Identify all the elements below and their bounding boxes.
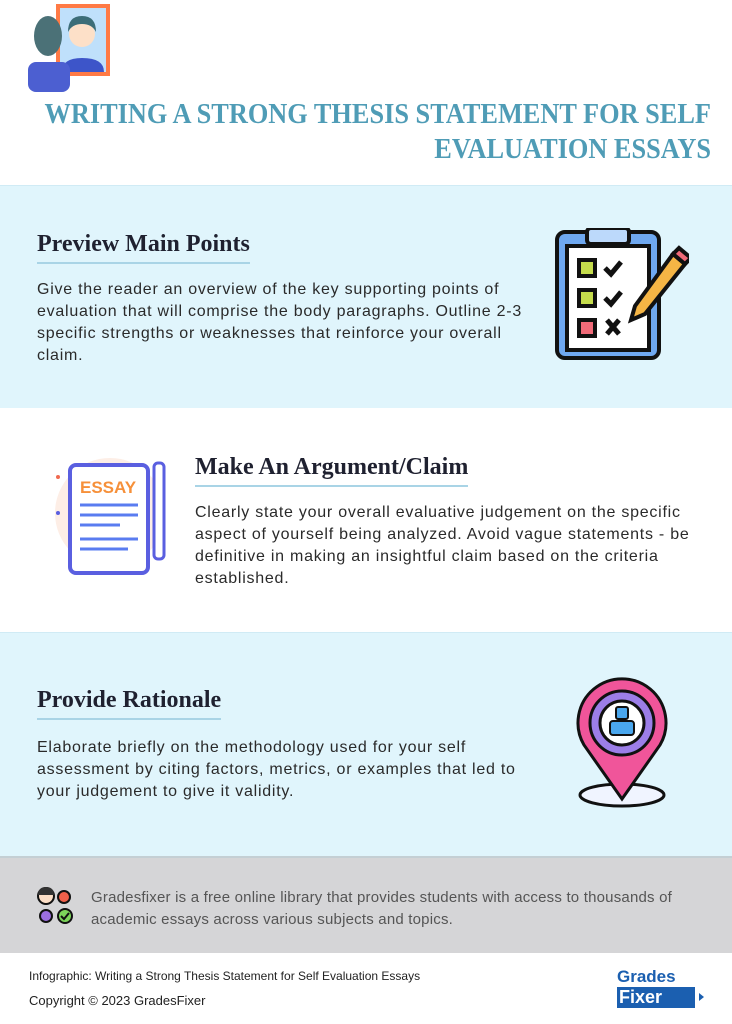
title: EVALUATION ESSAYS	[434, 134, 711, 165]
title: WRITING A STRONG THESIS STATEMENT FOR SELF	[45, 99, 711, 130]
text: provide rationale: your judgement to give it validity.	[37, 783, 294, 800]
heading: preview main points: Preview Main Points	[37, 231, 250, 257]
icon: location pin with person	[576, 677, 668, 808]
text: make an argument: established.	[195, 570, 289, 587]
icon: students A/B	[37, 887, 73, 924]
panel: provide rationale	[0, 632, 732, 856]
text: provide rationale	[37, 739, 516, 800]
panel: preview main points	[0, 185, 732, 408]
text: provide rationale: assessment by citing factors, metrics, or examples that led to	[37, 761, 516, 778]
icon: essay document	[55, 458, 166, 575]
text: make an argument: definitive in making an insightful claim based on the criteria	[195, 548, 659, 565]
text: gradesfixer description: Gradesfixer is a free online library that provides students with access to thousands of	[91, 889, 672, 906]
text: gradesfixer description: academic essays across various subjects and topics.	[91, 911, 453, 928]
text: make an argument	[195, 504, 689, 587]
heading: make an argument: Make An Argument/Claim	[195, 454, 468, 480]
footer copyright: Copyright © 2023 GradesFixer	[29, 993, 206, 1008]
text: preview main points: Give the reader an overview of the key supporting points of	[37, 281, 499, 298]
logo: gradesfixer: Grades	[617, 967, 676, 986]
text: make an argument: Clearly state your overall evaluative judgement on the specific	[195, 504, 681, 521]
panel: gradesfixer info	[0, 856, 732, 953]
logo: gradesfixer: Fixer	[619, 987, 662, 1007]
text: gradesfixer description	[91, 889, 672, 928]
logo: gradesfixer	[617, 967, 704, 1008]
icon: essay document: ESSAY	[80, 478, 137, 497]
icon: checklist clipboard	[555, 228, 689, 360]
heading: provide rationale: Provide Rationale	[37, 687, 221, 713]
panel: make an argument	[0, 408, 732, 632]
title	[44, 99, 711, 165]
text: preview main points: evaluation that will comprise the body paragraphs. Outline 2-3	[37, 303, 522, 320]
text: make an argument: aspect of yourself being analyzed. Avoid vague statements - be	[195, 526, 689, 543]
header icon: person looking in mirror	[28, 4, 110, 92]
text: preview main points	[37, 281, 522, 364]
footer caption: Infographic: Writing a Strong Thesis Statement for Self Evaluation Essays	[29, 969, 420, 983]
text: preview main points: claim.	[37, 347, 83, 364]
text: preview main points: specific strengths or weaknesses that reinforce your overall	[37, 325, 502, 342]
text: provide rationale: Elaborate briefly on the methodology used for your self	[37, 739, 466, 756]
